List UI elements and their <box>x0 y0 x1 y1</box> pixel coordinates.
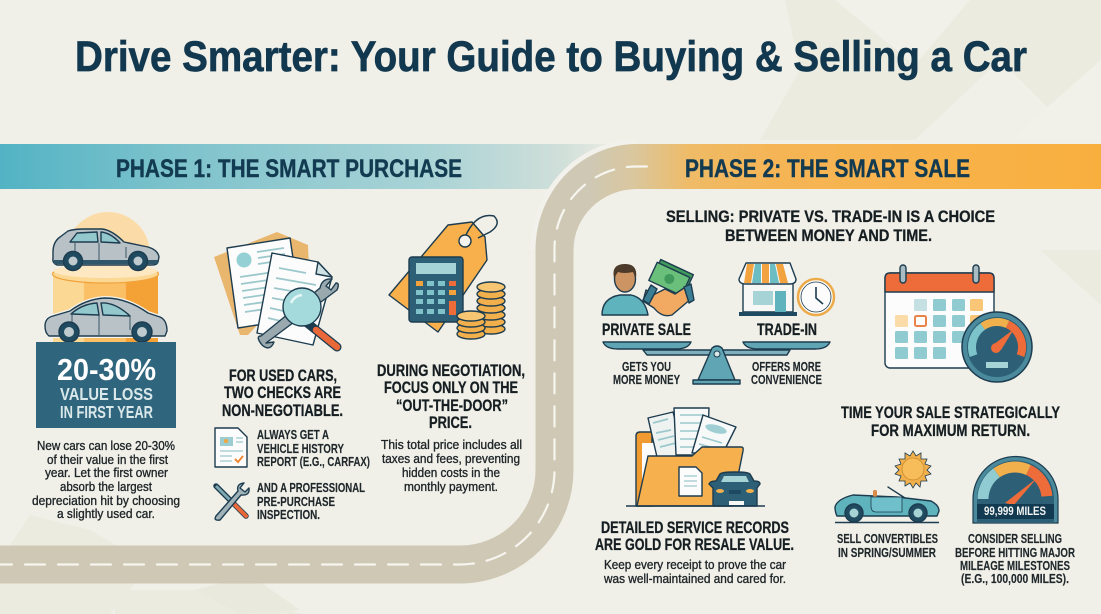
heading: out-the-door price <box>377 361 525 432</box>
text: history report: REPORT (E.G., CARFAX) <box>257 455 370 469</box>
icon: price tag, calculator and coins <box>389 215 505 339</box>
heading: money or time: BETWEEN MONEY AND TIME. <box>725 226 932 245</box>
header band: phase 1 <box>0 144 610 189</box>
stat box: value loss: IN FIRST YEAR <box>60 402 153 422</box>
text: history report: ALWAYS GET A <box>257 428 329 442</box>
icon: mileage gauge: 99,999 MILES <box>984 506 1046 518</box>
icon: sun <box>895 451 931 488</box>
icon: folder of receipts with car <box>626 408 765 506</box>
text: total price explanation: This total price includes all <box>381 437 522 452</box>
heading: phase 2: PHASE 2: THE SMART SALE <box>685 155 970 183</box>
heading: service records: DETAILED SERVICE RECORDS <box>601 518 789 537</box>
panel: depreciation <box>32 212 180 521</box>
text: gets you more money: GETS YOU <box>622 360 671 374</box>
text: keep every receipt: Keep every receipt to prove the car <box>604 557 787 572</box>
panel: timing the sale <box>835 265 1075 586</box>
text: depreciation advice: year. Let the first owner <box>45 465 169 480</box>
text: inspection <box>257 481 365 522</box>
heading: phase 1: PHASE 1: THE SMART PURCHASE <box>116 155 462 183</box>
panel: used car checks <box>214 232 370 522</box>
stat box: value loss <box>36 342 176 428</box>
panel: private vs trade-in <box>602 207 995 387</box>
heading: time your sale: FOR MAXIMUM RETURN. <box>871 421 1030 440</box>
text: mileage milestones: (E.G., 100,000 MILES). <box>961 572 1069 586</box>
text: mileage milestones: MILEAGE MILESTONES <box>960 559 1070 573</box>
icon: mileage gauge <box>973 456 1058 523</box>
text: total price explanation <box>381 437 522 494</box>
stat box: value loss: VALUE LOSS <box>60 384 153 404</box>
heading: two checks: FOR USED CARS, <box>229 366 337 385</box>
stat box: value loss: 20-30% <box>57 352 156 387</box>
icon: balance scale <box>603 342 830 384</box>
text: sell convertibles: IN SPRING/SUMMER <box>838 546 936 560</box>
heading: service records: ARE GOLD FOR RESALE VALUE. <box>595 535 794 554</box>
text: keep every receipt <box>603 557 787 586</box>
text: depreciation advice: a slightly used car. <box>57 506 155 521</box>
heading: money or time: SELLING: PRIVATE VS. TRADE-IN IS A CHOICE <box>666 207 995 226</box>
text: offers more convenience: CONVENIENCE <box>751 373 822 387</box>
icon: documents with magnifier and wrench <box>214 232 338 348</box>
header band: phase 2 <box>637 144 1101 189</box>
heading: money or time <box>666 207 995 245</box>
text: offers more convenience <box>751 360 822 387</box>
text: depreciation advice: of their value in the first <box>47 452 168 467</box>
icon: person, handshake and cash <box>602 259 694 316</box>
text: gets you more money: MORE MONEY <box>613 373 681 387</box>
text: mileage milestones <box>955 532 1075 586</box>
heading: service records <box>595 518 794 554</box>
road connecting phases <box>0 142 700 564</box>
icon: vehicle history report <box>215 428 247 467</box>
text: sell convertibles: SELL CONVERTIBLES <box>837 532 938 546</box>
text: total price explanation: hidden costs in the <box>402 465 500 480</box>
heading: out-the-door price: FOCUS ONLY ON THE <box>384 378 518 397</box>
icon: calendar and speedometer <box>885 265 1032 382</box>
heading: two checks: TWO CHECKS ARE <box>224 383 341 402</box>
panel: service records <box>595 408 794 586</box>
heading: out-the-door price: “OUT-THE-DOOR” <box>396 396 508 415</box>
text: inspection: INSPECTION. <box>257 508 320 522</box>
icon: dealership and clock <box>739 263 834 316</box>
heading: out-the-door price: PRICE. <box>429 413 472 432</box>
text: depreciation advice <box>32 438 180 521</box>
icon: crossed tools <box>215 483 249 520</box>
text: depreciation advice: depreciation hit by choosing <box>32 493 180 508</box>
label: private sale: PRIVATE SALE <box>602 320 691 339</box>
heading: time your sale <box>841 403 1060 440</box>
text: history report <box>257 428 370 469</box>
text: history report: VEHICLE HISTORY <box>257 442 345 456</box>
text: offers more convenience: OFFERS MORE <box>752 360 821 374</box>
text: sell convertibles <box>837 532 938 560</box>
heading: two checks <box>222 366 343 420</box>
text: total price explanation: monthly payment. <box>404 479 498 494</box>
panel: negotiation <box>377 215 525 494</box>
text: keep every receipt: was well-maintained and cared for. <box>603 571 786 586</box>
icon: cars on pedestal <box>45 212 167 344</box>
text: depreciation advice: New cars can lose 20-30% <box>37 438 175 453</box>
text: depreciation advice: absorb the largest <box>60 479 152 494</box>
heading: out-the-door price: DURING NEGOTIATION, <box>377 361 525 380</box>
text: inspection: AND A PROFESSIONAL <box>257 481 365 495</box>
text: inspection: PRE-PURCHASE <box>257 495 335 509</box>
icon: convertible car <box>835 487 939 522</box>
label: trade-in: TRADE-IN <box>757 320 817 339</box>
text: total price explanation: taxes and fees, preventing <box>382 451 520 466</box>
text: mileage milestones: CONSIDER SELLING <box>968 532 1062 546</box>
heading: two checks: NON-NEGOTIABLE. <box>222 401 343 420</box>
text: gets you more money <box>613 360 681 387</box>
